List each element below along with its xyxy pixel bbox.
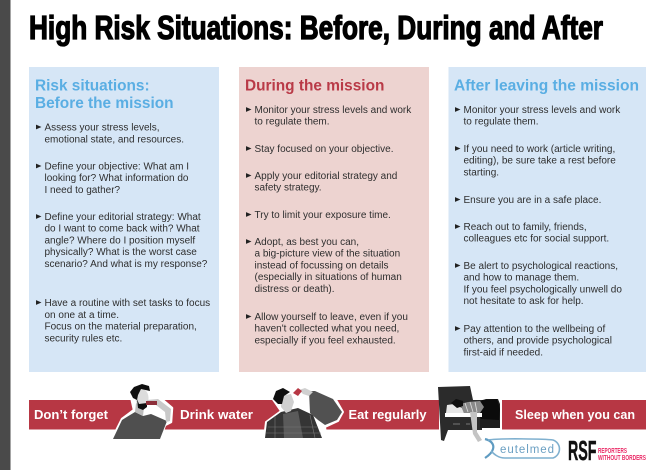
banner label: sleep when you can: Sleep when you can <box>515 408 635 422</box>
bullet list: after leaving the mission: Be alert to psychological reactions, <box>464 261 618 272</box>
bullet list: after leaving the mission: Ensure you are in a safe place. <box>464 195 601 206</box>
bullet list: before the mission: Focus on the material preparation, <box>44 322 197 333</box>
bullet list: before the mission: Define your objective: What am I <box>44 161 189 172</box>
heading: after leaving the mission: After leaving the mission <box>454 78 639 94</box>
bullet list: before the mission: Have a routine with set tasks to focus <box>44 298 210 309</box>
bullet list: during the mission <box>246 105 412 346</box>
banner label: don't forget: Don’t forget <box>34 408 109 422</box>
logo: eutelmed <box>485 439 559 458</box>
bullet list: after leaving the mission <box>455 105 622 358</box>
bullet list: before the mission: Assess your stress levels, <box>44 122 160 134</box>
bullet list: during the mission: to regulate them. <box>254 117 330 128</box>
panel: during the mission <box>239 67 429 372</box>
bullet list: before the mission: do I want to come back with? What <box>44 224 200 235</box>
bullet list: after leaving the mission: Pay attention to the wellbeing of <box>464 324 605 335</box>
bullet list: during the mission: instead of focussing on details <box>254 260 388 271</box>
bullet list: before the mission: I need to gather? <box>44 185 121 196</box>
bullet list: during the mission: Monitor your stress levels and work <box>254 105 412 116</box>
bullet list: after leaving the mission: Reach out to family, friends, <box>464 222 587 233</box>
bullet list: during the mission: Try to limit your exposure time. <box>254 210 391 221</box>
panel: after leaving the mission <box>448 67 646 372</box>
bullet list: before the mission <box>36 122 210 344</box>
icon: person asleep on sofa <box>438 386 502 442</box>
bullet list: during the mission: Adopt, as best you can, <box>254 237 359 248</box>
heading: before the mission: Risk situations: <box>35 78 150 94</box>
icon: man drinking <box>112 384 172 439</box>
bullet list: during the mission: Apply your editorial strategy and <box>254 171 397 182</box>
bullet list: during the mission: safety strategy. <box>254 183 322 194</box>
bullet list: before the mission: scenario? And what is my response? <box>44 259 208 270</box>
bullet list: before the mission: angle? Where do I position myself <box>44 235 195 246</box>
heading: during the mission: During the mission <box>245 78 384 94</box>
bullet list: during the mission: a big-picture view of the situation <box>254 249 400 260</box>
bullet list: before the mission: emotional state, and resources. <box>44 134 184 145</box>
bullet list: during the mission: especially if you feel exhausted. <box>254 335 396 346</box>
reminder banner <box>29 400 646 430</box>
left sidebar bar <box>0 0 10 470</box>
logo: RSF reporters without borders: REPORTERS <box>598 446 627 455</box>
banner label: eat regularly: Eat regularly <box>348 408 426 422</box>
bullet list: before the mission: on one at a time. <box>44 310 119 321</box>
bullet list: during the mission: Stay focused on your objective. <box>254 144 393 155</box>
bullet list: after leaving the mission: starting. <box>464 167 499 178</box>
bullet list: after leaving the mission: to regulate them. <box>464 117 539 128</box>
bullet list: during the mission: Allow yourself to leave, even if you <box>254 312 408 323</box>
bullet list: during the mission: haven't collected what you need, <box>254 324 399 335</box>
bullet list: before the mission: security rules etc. <box>44 333 122 344</box>
bullet list: after leaving the mission: editing), be sure take a rest before <box>464 156 616 167</box>
logo: eutelmed: eutelmed <box>500 444 554 456</box>
banner label: drink water: Drink water <box>180 408 253 422</box>
bullet list: during the mission: (especially in situations of human <box>254 272 402 283</box>
bullet list: before the mission: Define your editorial strategy: What <box>44 212 201 223</box>
logo: RSF reporters without borders: RSF <box>568 435 596 466</box>
bullet list: after leaving the mission: others, and provide psychological <box>464 336 612 347</box>
bullet list: after leaving the mission: Monitor your stress levels and work <box>464 105 621 116</box>
bullet list: after leaving the mission: not hesitate to ask for help. <box>464 296 584 307</box>
heading: before the mission: Before the mission <box>35 95 174 112</box>
bullet list: before the mission: physically? What is the worst case <box>44 247 197 258</box>
bullet list: after leaving the mission: colleagues etc for social support. <box>464 234 609 245</box>
bullet list: after leaving the mission: first-aid if needed. <box>464 347 543 358</box>
bullet list: after leaving the mission: If you need to work (article writing, <box>464 144 615 155</box>
panel: before the mission <box>29 67 219 372</box>
bullet list: after leaving the mission: and how to manage them. <box>464 273 579 284</box>
bullet list: during the mission: distress or death). <box>254 284 335 295</box>
bullet list: after leaving the mission: If you feel psychologically unwell do <box>464 284 622 295</box>
bullet list: before the mission: looking for? What information do <box>44 173 189 184</box>
icon: man holding cup <box>264 387 343 439</box>
